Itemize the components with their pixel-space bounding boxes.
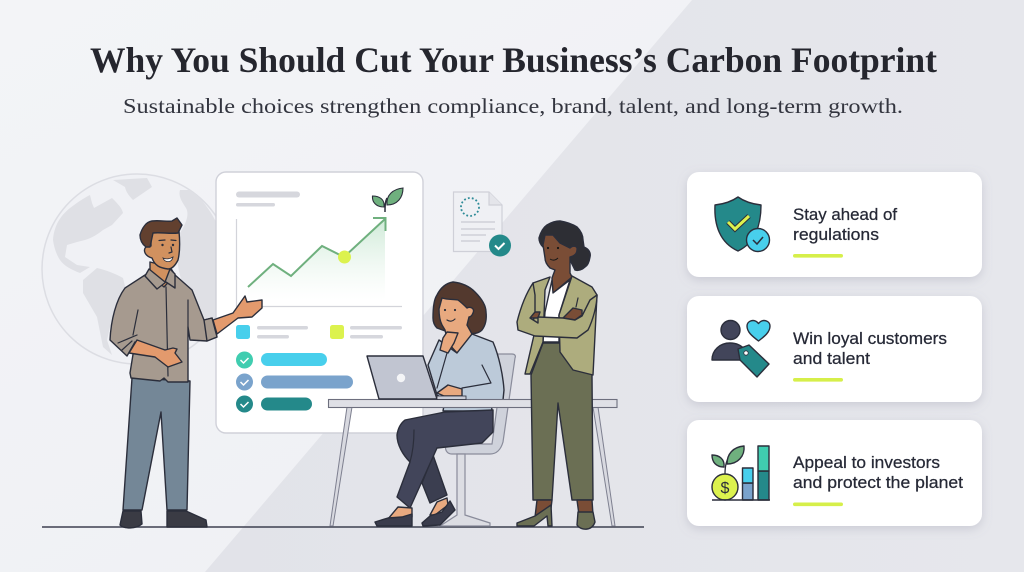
checklist <box>236 352 353 412</box>
standing woman hands <box>527 308 582 320</box>
subtitle: Sustainable choices strengthen compliance, brand, talent, and long-term growth. <box>123 94 903 118</box>
document icon <box>454 192 511 256</box>
seated woman legs <box>375 410 493 526</box>
man right cuff <box>204 318 217 341</box>
standing woman neck and face <box>543 235 577 293</box>
card: investors <box>687 420 982 526</box>
standing woman shoes <box>517 505 552 526</box>
seated woman sleeve lines <box>437 353 491 388</box>
seated woman hand on keyboard <box>437 385 462 396</box>
card text: investors: and protect the planet <box>793 474 963 492</box>
man face details <box>163 257 173 262</box>
growth chart <box>236 218 402 306</box>
seated woman back leg <box>422 455 447 503</box>
seated woman face <box>439 298 474 353</box>
card: customers <box>687 296 982 402</box>
seated woman feet <box>388 507 412 519</box>
man right hand <box>213 296 262 334</box>
man left hand <box>129 340 182 367</box>
man hair <box>140 218 182 247</box>
man shirt <box>110 268 217 382</box>
standing woman hair bun <box>539 221 590 270</box>
standing woman blazer left panel <box>525 277 550 374</box>
table top <box>328 400 617 408</box>
icon: coin, sprout and bars <box>712 446 770 500</box>
chair <box>440 354 515 526</box>
seated woman hair <box>433 282 486 334</box>
standing woman ankles <box>535 500 593 517</box>
accent underline <box>793 254 843 258</box>
man trousers <box>123 378 190 510</box>
icon: shield with check <box>715 197 770 252</box>
seated woman hand at chin <box>440 332 458 353</box>
table <box>328 400 617 526</box>
man neck <box>150 262 175 287</box>
man shoes <box>120 511 207 528</box>
table legs <box>330 407 615 526</box>
card: regulations <box>687 172 982 277</box>
card text: investors: Appeal to investors <box>793 454 940 472</box>
legend <box>236 325 402 339</box>
chair stand <box>440 454 490 526</box>
title: Why You Should Cut Your Business’s Carbon Footprint <box>90 40 937 80</box>
seated woman <box>428 282 504 411</box>
chair back and seat <box>446 354 515 454</box>
card text: customers: Win loyal customers <box>793 330 947 348</box>
standing woman trousers <box>531 343 593 500</box>
standing woman shirt <box>543 280 570 342</box>
ground line <box>42 526 644 528</box>
board header lines <box>236 192 300 206</box>
accent underline <box>793 378 843 382</box>
icon: sprout <box>372 188 403 212</box>
card text: customers: and talent <box>793 350 870 368</box>
icon: coin, sprout and bars: $ <box>721 480 730 497</box>
presentation board <box>216 172 423 433</box>
standing woman crossed arms <box>517 283 597 338</box>
man shirt seams <box>118 287 212 376</box>
man head <box>145 231 180 269</box>
standing woman <box>517 221 597 529</box>
card text: regulations: Stay ahead of <box>793 206 897 224</box>
seated woman front leg <box>397 410 493 508</box>
standing woman blazer right panel <box>559 276 597 375</box>
icon: person, heart and tag <box>712 320 770 377</box>
man collar <box>145 269 175 289</box>
accent underline <box>793 502 843 506</box>
card text: regulations: regulations <box>793 226 879 244</box>
man presenting <box>110 218 262 528</box>
seated woman sweater <box>428 334 504 411</box>
globe <box>42 174 232 364</box>
laptop <box>367 356 466 400</box>
